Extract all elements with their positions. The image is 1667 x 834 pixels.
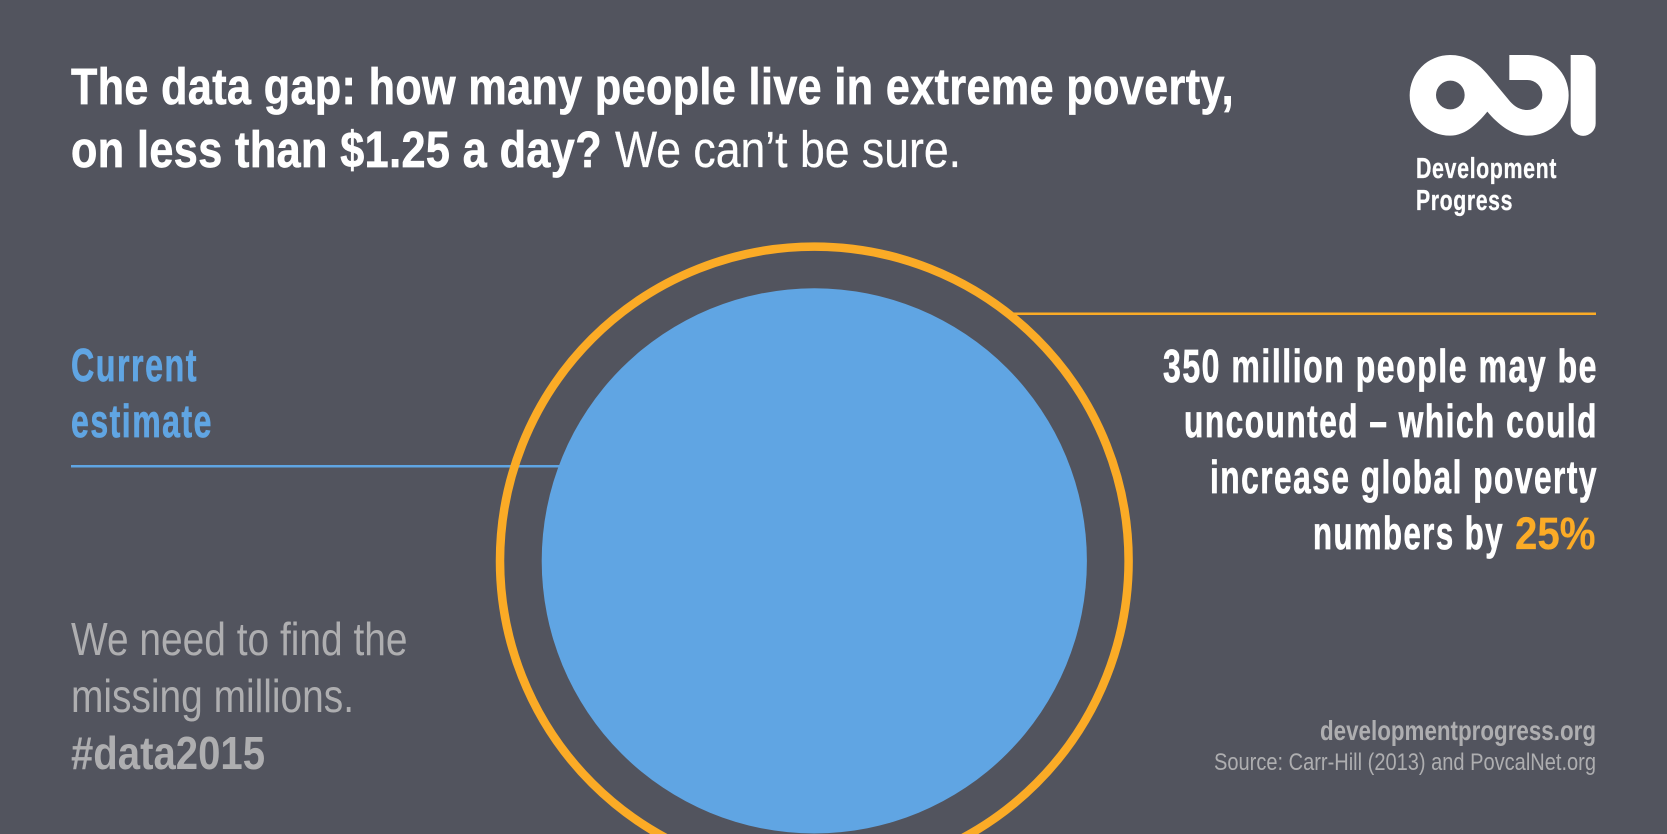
uncounted outer ring [500, 247, 1129, 834]
leader line: current estimate [71, 465, 560, 468]
callout: 350 million uncounted [1163, 340, 1598, 559]
call to action text: missing millions. [71, 670, 354, 722]
call to action text [71, 613, 408, 779]
label: current estimate: Current [71, 339, 198, 391]
logo text: Development Progress [1416, 153, 1557, 217]
logo text: Development Progress: Progress [1416, 185, 1513, 217]
icon: ODI logo [1410, 55, 1596, 136]
title [71, 58, 1234, 178]
title: on less than $1.25 a day? [71, 121, 602, 178]
leader line: uncounted [1013, 312, 1596, 315]
logo text: Development Progress: Development [1416, 153, 1557, 185]
title: We can’t be sure. [615, 121, 961, 178]
call to action text: #data2015 [71, 727, 265, 779]
title: The data gap: how many people live in extreme poverty, [71, 58, 1234, 115]
label: current estimate: estimate [71, 395, 213, 447]
callout: 350 million uncounted: numbers by [1313, 507, 1504, 559]
label: current estimate [71, 339, 213, 447]
website and source: developmentprogress.org [1320, 715, 1596, 746]
chart: poverty estimate circles [500, 247, 1129, 834]
call to action text: We need to find the [71, 613, 408, 665]
callout: 350 million uncounted: 25% [1515, 508, 1596, 559]
website and source [1214, 715, 1596, 776]
current estimate circle [542, 288, 1087, 833]
website and source: Source: Carr-Hill (2013) and PovcalNet.org [1214, 749, 1596, 776]
